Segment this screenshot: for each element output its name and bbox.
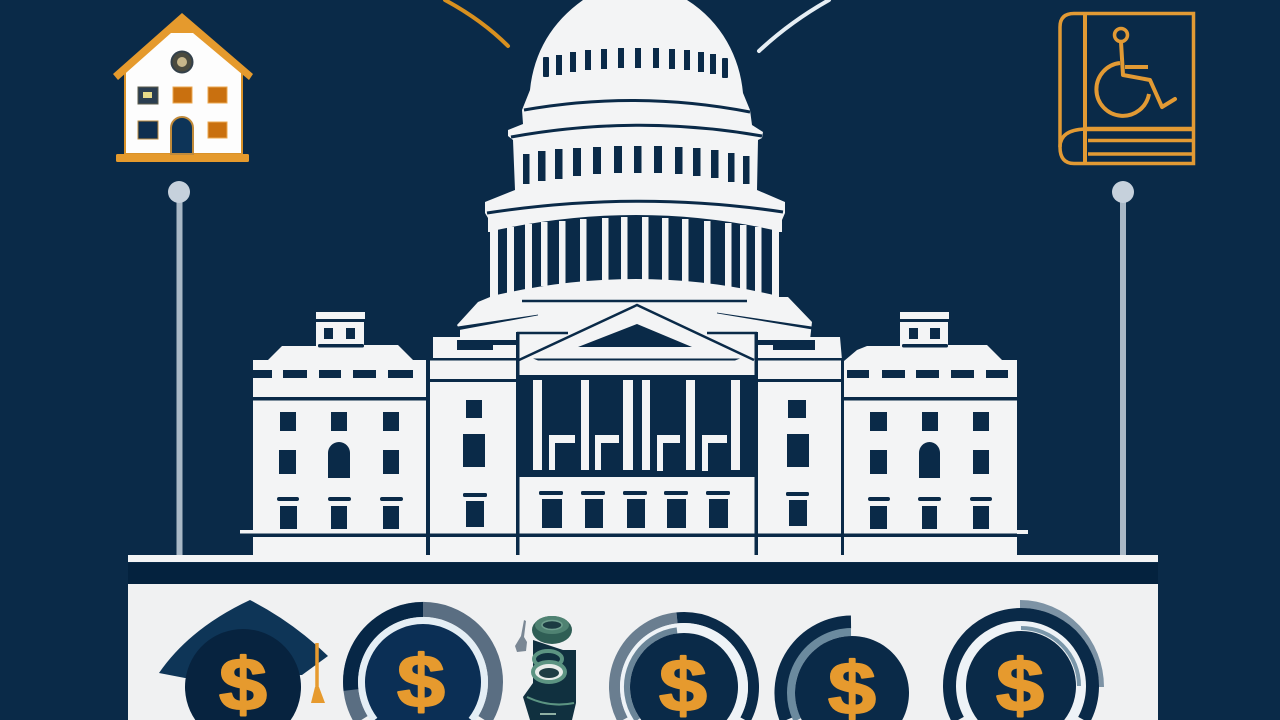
- icon: dollar coin ring: [350, 609, 496, 720]
- drum windows: [523, 146, 750, 184]
- arc: white connector: [759, 0, 829, 51]
- portico columns: [518, 375, 756, 477]
- capitol dome: [457, 0, 812, 340]
- portico lower windows: [517, 491, 756, 537]
- left pavilion: [430, 337, 518, 560]
- colonnade: [492, 215, 778, 296]
- right wing: [844, 312, 1158, 562]
- strip under ground: [128, 563, 1158, 584]
- icon: accessibility book: [1060, 14, 1194, 164]
- arc: orange connector: [445, 0, 508, 46]
- pole: left: [168, 181, 190, 556]
- icon: dollar coin double ring: [950, 600, 1104, 720]
- icon: dollar coin with arc: [781, 622, 909, 720]
- icon: money roll: [515, 616, 576, 720]
- right pavilion: [755, 337, 843, 560]
- ground line: [128, 555, 1158, 562]
- pole: right: [1112, 181, 1134, 556]
- icon: house: [113, 13, 253, 162]
- icon: dollar coin with split ring: [614, 618, 754, 720]
- left wing: [240, 312, 427, 562]
- wall dividers: [427, 332, 844, 559]
- pediment: [517, 303, 757, 362]
- dome windows: [543, 48, 728, 78]
- capitol building: [128, 0, 1158, 562]
- icon: graduation cap with dollar: [159, 600, 328, 720]
- panel: funding icons: [128, 584, 1158, 720]
- central portico: [427, 303, 844, 561]
